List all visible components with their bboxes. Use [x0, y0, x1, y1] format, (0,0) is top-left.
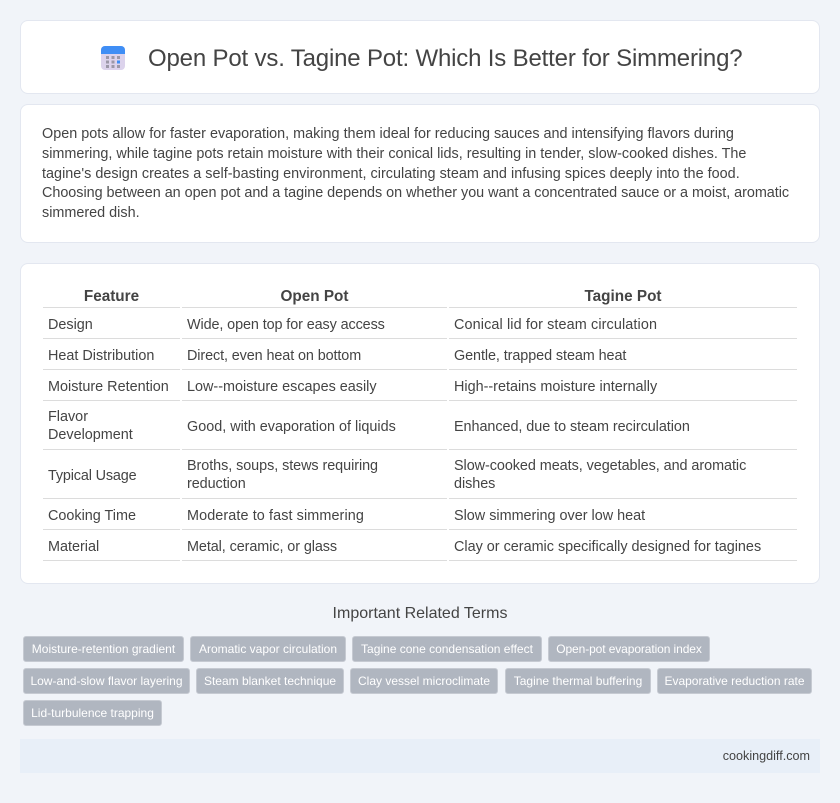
row: moisture retention: High--retains moisture internally [454, 379, 657, 395]
row: material: Metal, ceramic, or glass [187, 539, 337, 555]
heading: related terms: Important Related Terms [333, 605, 507, 622]
row: flavor development: Good, with evaporation of liquids [187, 419, 396, 435]
row: cooking time [48, 508, 646, 524]
row: cooking time: Moderate to fast simmering [187, 508, 364, 524]
row: design: Conical lid for steam circulation [454, 317, 657, 333]
row: typical usage: Typical Usage [48, 468, 136, 484]
row: material: Material [48, 539, 99, 555]
table header [84, 288, 662, 305]
icon: calendar grid [101, 46, 125, 70]
row: moisture retention: Low--moisture escapes easily [187, 379, 377, 395]
row: typical usage: reduction [187, 476, 246, 492]
text block: summary paragraph: Choosing between an open pot and a tagine depends on whether you want a concentrated sauce or a moist, aromatic [42, 185, 789, 201]
text block: summary paragraph: Open pots allow for faster evaporation, making them ideal for reducing sauces and intensifying flavors during [42, 126, 734, 142]
row: moisture retention: Moisture Retention [48, 379, 169, 395]
row: design [48, 317, 657, 333]
row: typical usage: dishes [454, 476, 495, 492]
row: design: Wide, open top for easy access [187, 317, 385, 333]
text block: summary paragraph: simmered dish. [42, 205, 140, 221]
tag list: related terms: Open-pot evaporation index [556, 642, 702, 656]
text block: summary paragraph [42, 126, 789, 221]
text block: summary paragraph: simmering, while tagine pots retain moisture with their conical lids, resulting in tender, slow-cooked dishes. The [42, 146, 746, 162]
row: flavor development: Enhanced, due to steam recirculation [454, 419, 690, 435]
row: material: Clay or ceramic specifically designed for tagines [454, 539, 761, 555]
row: heat distribution: Gentle, trapped steam heat [454, 348, 626, 364]
table header: Feature [84, 288, 139, 305]
row: typical usage [48, 458, 746, 492]
row: heat distribution [48, 348, 626, 364]
tag list: related terms: Aromatic vapor circulation [199, 642, 337, 656]
title: Open Pot vs. Tagine Pot: Which Is Better for Simmering? [148, 45, 742, 72]
row: flavor development: Development [48, 427, 133, 443]
row: typical usage: Broths, soups, stews requiring [187, 458, 378, 474]
tag list: related terms: Low-and-slow flavor layering [30, 674, 183, 688]
tag list: related terms: Clay vessel microclimate [358, 674, 490, 688]
panel: introduction [20, 104, 820, 243]
text block: summary paragraph: tagine's design creates a self-basting environment, circulating steam and infusing spices deeply into the food. [42, 166, 740, 182]
row: heat distribution: Heat Distribution [48, 348, 154, 364]
row: typical usage: Slow-cooked meats, vegetables, and aromatic [454, 458, 746, 474]
panel: title card [20, 20, 820, 94]
row: flavor development: Flavor [48, 409, 88, 425]
tag list: related terms: Tagine cone condensation effect [361, 642, 533, 656]
row: moisture retention [48, 379, 658, 395]
row: cooking time: Slow simmering over low heat [454, 508, 645, 524]
row: design: Design [48, 317, 93, 333]
tag list: related terms: Evaporative reduction rate [664, 674, 805, 688]
panel: comparison table [20, 263, 820, 584]
tag list: related terms [23, 636, 812, 726]
row: material [48, 539, 761, 555]
tag list: related terms: Tagine thermal buffering [514, 674, 642, 688]
row: flavor development [48, 409, 690, 443]
footer source: cookingdiff.com [723, 749, 810, 763]
row: heat distribution: Direct, even heat on bottom [187, 348, 361, 364]
footer bar [20, 739, 820, 773]
tag list: related terms: Lid-turbulence trapping [31, 706, 154, 720]
tag list: related terms: Steam blanket technique [204, 674, 336, 688]
table header: Open Pot [280, 288, 348, 305]
table header: Tagine Pot [584, 288, 662, 305]
row: cooking time: Cooking Time [48, 508, 136, 524]
tag list: related terms: Moisture-retention gradient [32, 642, 175, 656]
